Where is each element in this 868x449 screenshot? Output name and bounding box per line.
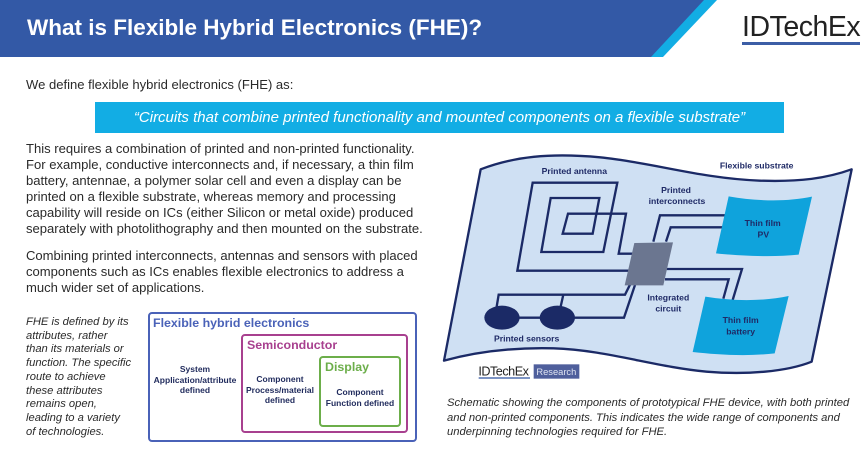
paragraph: requirements: battery, antennae, a polymer solar cell and even a display can be [26, 173, 401, 188]
definition banner: “Circuits that combine printed functionality and mounted components on a flexible substrate” [134, 109, 745, 126]
text: system: System [180, 364, 210, 374]
text: system: Application/attribute [154, 375, 236, 385]
flexible substrate [444, 155, 852, 373]
diagram labels: circuit [655, 303, 681, 313]
paragraph: requirements: This requires a combination of printed and non-printed functionality. [26, 141, 414, 156]
side note: route to achieve [26, 371, 106, 383]
intro text: We define flexible hybrid electronics (FHE) as: [26, 77, 293, 92]
paragraph: requirements: printed on a flexible substrate, whereas memory and processing [26, 189, 396, 204]
panel: display [319, 356, 401, 427]
diagram labels: Printed antenna [542, 166, 607, 176]
side note: remains open, [26, 398, 97, 410]
diagram labels: Integrated [647, 292, 689, 302]
diagram labels: battery [726, 326, 755, 336]
side note: leading to a variety [26, 412, 120, 424]
side note: FHE is defined by its [26, 316, 129, 328]
heading: Semiconductor: Semiconductor [247, 338, 337, 352]
paragraph: requirements: capability will reside on ICs (either Silicon or metal oxide) produced [26, 205, 413, 220]
text: component function [326, 387, 394, 408]
paragraph: applications: Combining printed interconnects, antennas and sensors with placed [26, 248, 418, 263]
paragraph: applications: much wider set of applications. [26, 280, 204, 295]
diagram labels: Thin film [723, 315, 759, 325]
diagram labels: Printed sensors [494, 333, 560, 343]
text: component function: Function defined [326, 398, 394, 408]
header banner [0, 0, 717, 57]
text: component function: Component [336, 387, 384, 397]
definition banner [95, 102, 784, 133]
panel: semiconductor [241, 334, 408, 433]
side note [26, 316, 131, 438]
text: component process: defined [265, 395, 295, 405]
paragraph: applications [26, 248, 418, 295]
diagram labels: Thin film [745, 218, 781, 228]
side note: than its materials or [26, 343, 124, 355]
diagram labels: interconnects [649, 196, 706, 206]
text: component process [246, 374, 314, 405]
paragraph: requirements: For example, conductive interconnects and, if necessary, a thin film [26, 157, 414, 172]
thin film PV [716, 196, 812, 256]
diagram labels: Printed [661, 185, 691, 195]
diagram labels: PV [758, 229, 769, 239]
heading: Display: Display [325, 360, 369, 374]
side note: function. The specific [26, 357, 131, 369]
schematic caption [447, 397, 850, 438]
research logo: Research [536, 367, 576, 377]
paragraph: requirements: separately with photolithography and then mounted on the substrate. [26, 221, 423, 236]
schematic caption: and non-printed components. This indicates the wide range of components and [447, 412, 840, 424]
side note: of technologies. [26, 426, 104, 438]
side note: these attributes [26, 385, 102, 397]
text: system [154, 364, 236, 395]
title: What is Flexible Hybrid Electronics (FHE)? [27, 15, 482, 40]
text: component process: Component [256, 374, 304, 384]
thin film battery [693, 296, 789, 355]
side note: attributes, rather [26, 330, 107, 342]
paragraph: applications: components such as ICs enables flexible electronics to address a [26, 264, 404, 279]
diagram labels [494, 160, 794, 343]
text: component process: Process/material [246, 385, 314, 395]
research logo [478, 364, 579, 379]
heading: Flexible hybrid electronics: Flexible hybrid electronics [153, 316, 309, 330]
text: system: defined [180, 385, 210, 395]
logo: IDTechEx: IDTechEx [742, 11, 860, 43]
antenna and interconnect traces [497, 183, 742, 318]
research logo: IDTechEx [478, 365, 530, 379]
nested definition diagram [148, 312, 417, 442]
diagram labels: Flexible substrate [720, 160, 794, 170]
schematic caption: Schematic showing the components of prototypical FHE device, with both printed [447, 397, 849, 409]
FHE schematic [442, 154, 853, 379]
printed sensors [484, 306, 575, 330]
schematic caption: underpinning technologies required for FHE. [447, 426, 667, 438]
integrated circuit [625, 242, 673, 285]
paragraph: requirements [26, 141, 423, 236]
